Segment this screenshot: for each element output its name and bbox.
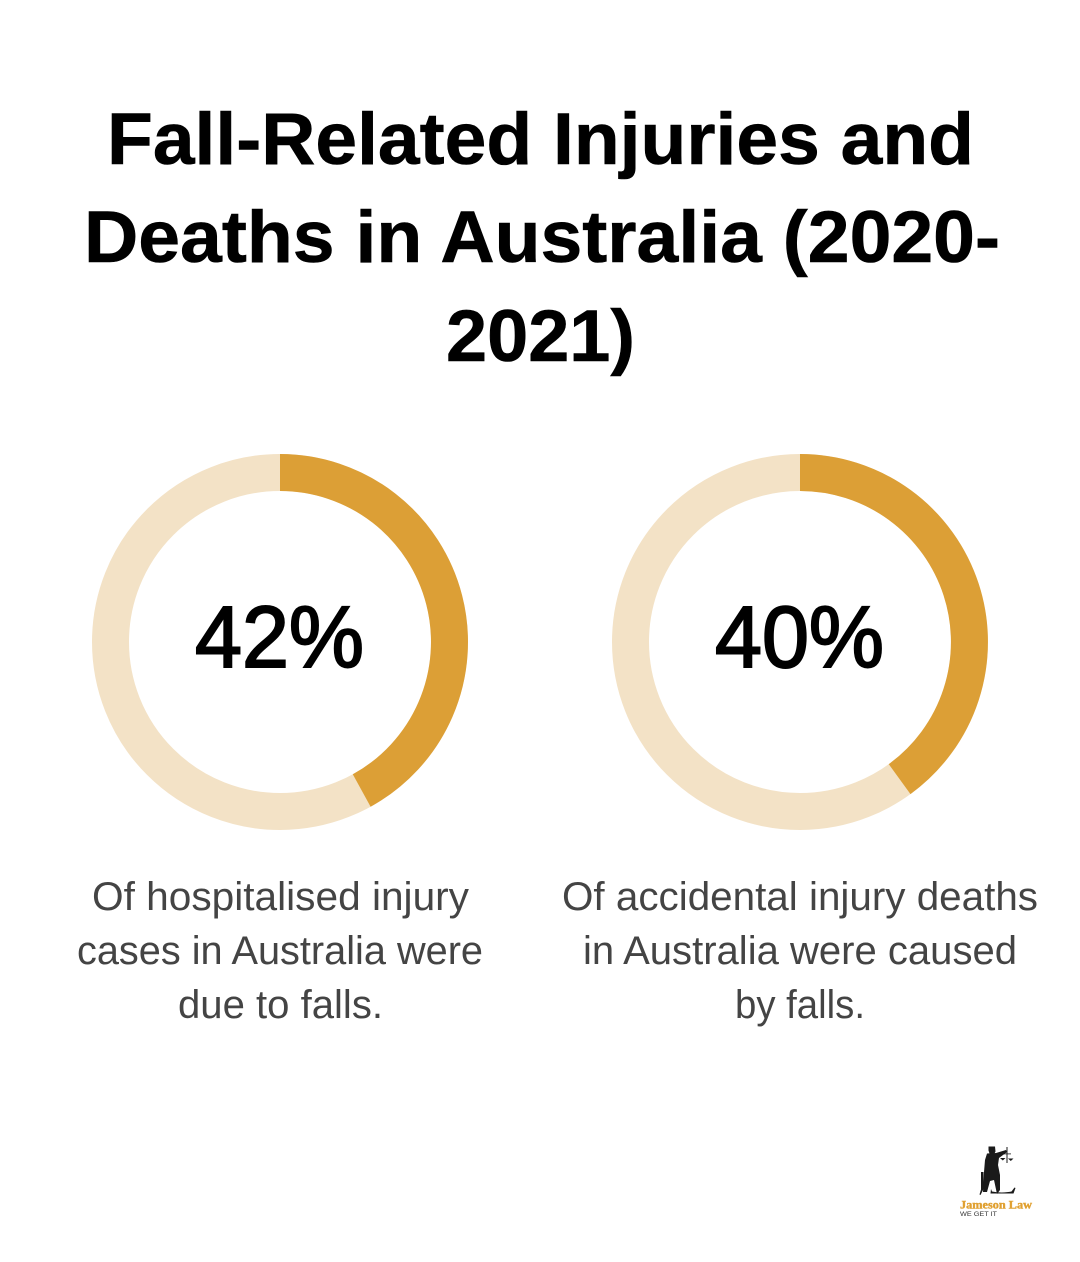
logo: Jameson Law: [960, 1146, 1033, 1218]
description: hospitalised injury cases: cases in Australia were: [77, 929, 483, 973]
donut chart: 42%: [110, 472, 450, 812]
icon: lady justice with L: [980, 1146, 1016, 1195]
description: accidental injury deaths: by falls.: [735, 983, 865, 1027]
logo name: Jameson Law: [960, 1200, 1033, 1212]
donut chart: 40%: [630, 472, 970, 812]
value: 42%: 42%: [195, 589, 364, 686]
panel: 40% accidental injury deaths: [562, 472, 1038, 1027]
panel: 42% hospitalised injury cases: [77, 472, 483, 1027]
description: accidental injury deaths: in Australia were caused: [583, 929, 1017, 973]
description: hospitalised injury cases: [77, 875, 483, 1027]
logo tagline: WE GET IT: [960, 1211, 997, 1218]
description: accidental injury deaths: [562, 875, 1038, 1027]
title: 2021): [446, 296, 635, 377]
description: accidental injury deaths: Of accidental injury deaths: [562, 875, 1038, 919]
description: hospitalised injury cases: Of hospitalised injury: [92, 875, 469, 919]
value: 40%: 40%: [715, 589, 884, 686]
title: Deaths in Australia (2020-: [84, 197, 1000, 278]
title: Fall-Related Injuries and: [107, 99, 974, 180]
title: [84, 99, 1000, 377]
description: hospitalised injury cases: due to falls.: [178, 983, 383, 1027]
